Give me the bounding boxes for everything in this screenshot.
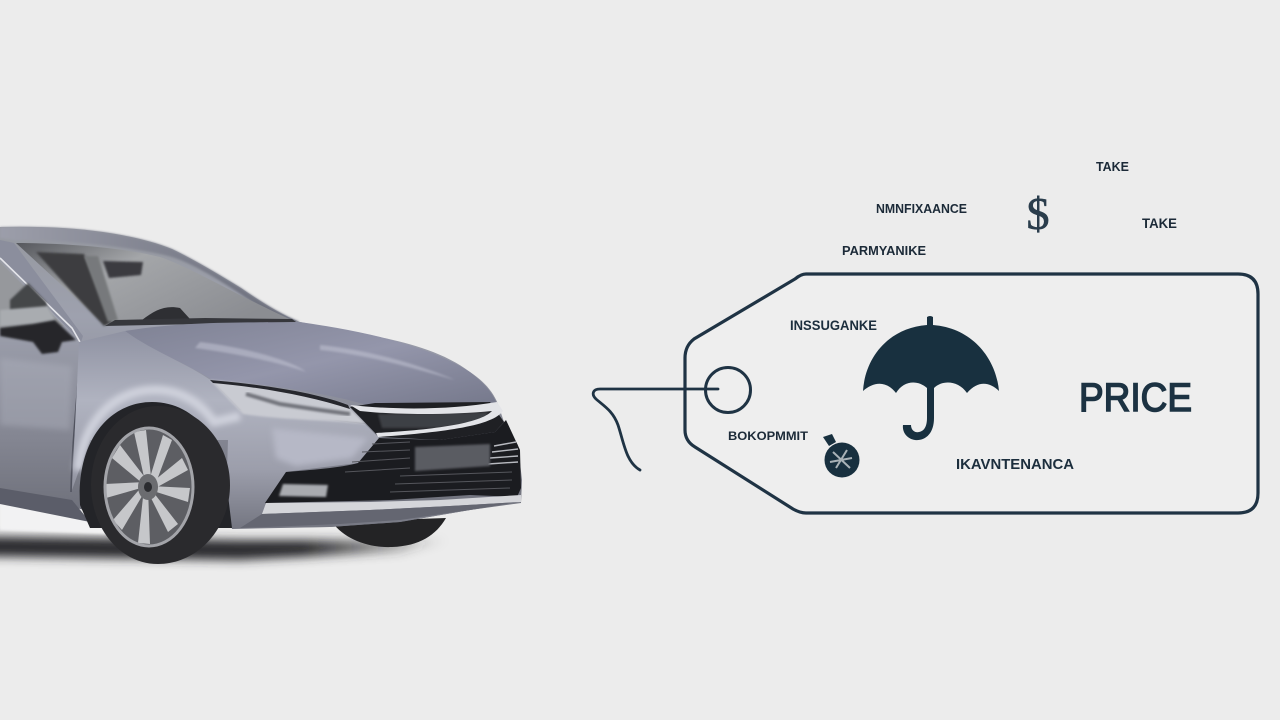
label: insurance: INSSUGANKE <box>790 317 877 333</box>
label: maintenance lower: PARMYANIKE <box>842 243 926 258</box>
ground shadow <box>0 536 450 560</box>
lower grille <box>265 420 521 503</box>
white sill reflection <box>0 526 106 535</box>
sill <box>0 488 90 522</box>
licence plate <box>415 444 490 471</box>
car body silhouette <box>0 227 522 528</box>
chrome lip <box>262 495 521 514</box>
bumper highlight panel <box>272 428 368 466</box>
far tyre <box>332 518 446 547</box>
icon: money bag <box>823 434 860 478</box>
alloy rim <box>105 427 193 547</box>
label: equipment: BOKOPMMIT <box>728 429 809 443</box>
roof strip <box>0 227 300 322</box>
A-pillar <box>0 240 83 342</box>
label: maintenance upper: NMNFIXAANCE <box>876 201 967 216</box>
wheel arch <box>80 402 232 528</box>
tyre <box>102 415 230 564</box>
lower valance <box>240 502 519 528</box>
grille upper <box>350 402 504 440</box>
car <box>0 227 522 564</box>
icon: umbrella <box>863 316 999 440</box>
door highlight band <box>0 358 72 430</box>
price tag <box>593 274 1258 513</box>
side window <box>0 262 64 330</box>
grille slats <box>345 442 518 492</box>
hood highlights <box>195 342 455 380</box>
wheel hub <box>138 474 158 500</box>
windscreen <box>16 243 296 325</box>
label: maintenance: IKAVNTENANCA <box>956 456 1074 473</box>
wheel arch highlight <box>78 390 240 470</box>
chrome grille bar <box>350 402 503 437</box>
label: tax right: TAKE <box>1142 215 1177 231</box>
door seam <box>70 386 77 492</box>
headlight <box>210 380 366 424</box>
tag outline <box>685 274 1258 513</box>
side mirror <box>0 320 76 354</box>
label: tax top: TAKE <box>1096 159 1129 174</box>
interior dark area <box>36 252 112 326</box>
fog light <box>279 484 328 497</box>
hood <box>125 322 497 406</box>
tag eyelet <box>706 368 750 412</box>
tag string <box>593 389 718 470</box>
icon: dollar sign: $ <box>1026 188 1050 239</box>
floating cost labels <box>842 159 1177 258</box>
fender and bumper <box>72 331 521 529</box>
label: price: PRICE <box>1079 376 1192 420</box>
